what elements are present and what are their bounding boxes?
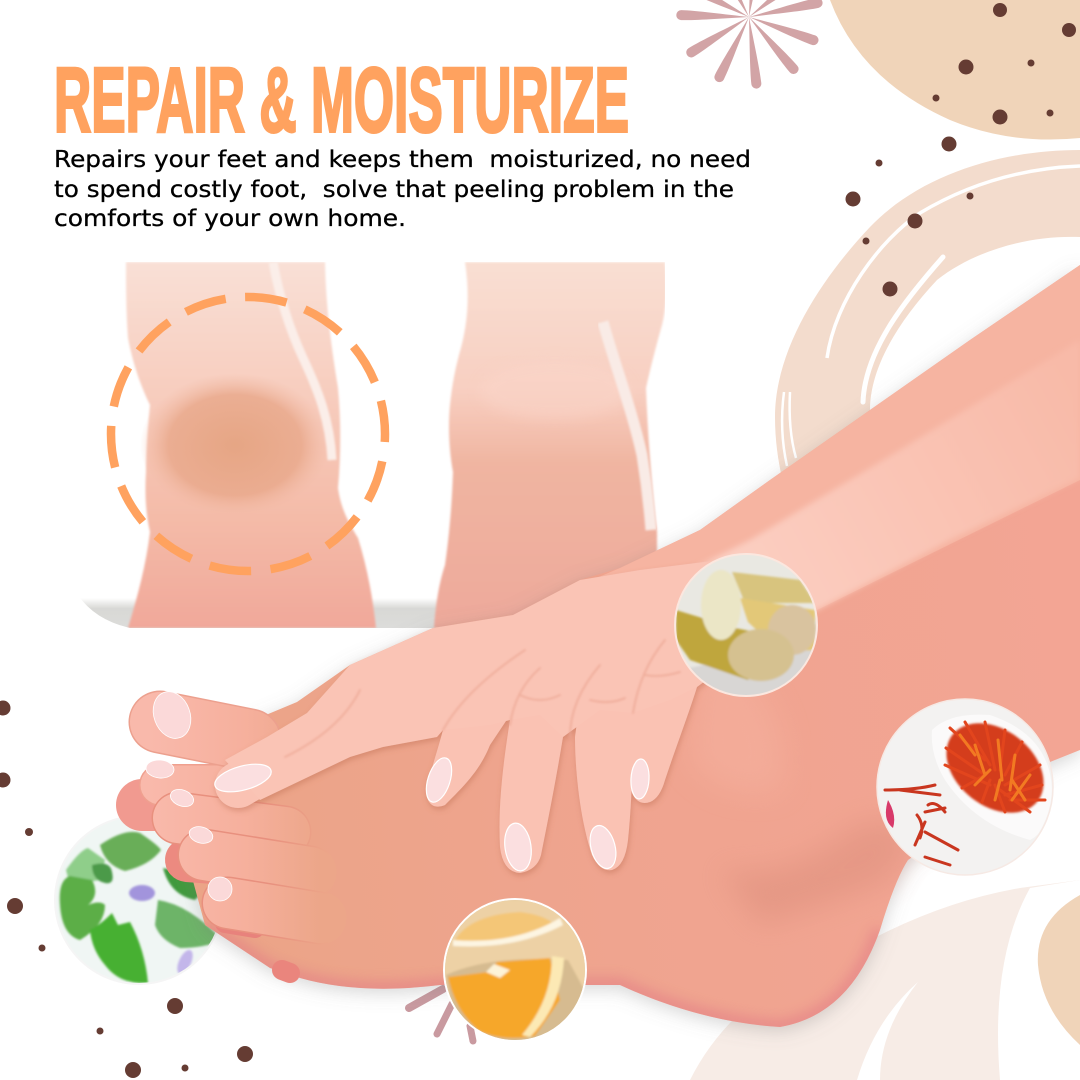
- toenails: [145, 686, 232, 901]
- body text: comforts of your own home.: [54, 204, 406, 232]
- photo: cracked heel and smooth heel: [78, 262, 666, 628]
- body text: Repairs your feet and keeps them moisturized, no need: [54, 145, 751, 173]
- ingredient: sugarcane: [675, 554, 820, 700]
- body text: to spend costly foot, solve that peeling problem in the: [54, 175, 734, 203]
- decorative dots top right: [846, 3, 1076, 296]
- toes: [142, 722, 320, 973]
- sole shading: [205, 925, 880, 1027]
- upper leg: [580, 265, 1080, 610]
- background blobs: [690, 0, 1080, 1080]
- ankle shading: [720, 821, 915, 925]
- leg silhouette: [170, 265, 1080, 1027]
- hand: [212, 560, 760, 873]
- title: REPAIR & MOISTURIZE: [54, 50, 629, 152]
- palm: [225, 560, 760, 800]
- foot and leg: [142, 265, 1080, 1027]
- fingers: [427, 680, 697, 873]
- dashed circle highlight: [111, 297, 385, 571]
- pale band: [640, 340, 1080, 650]
- ingredient: saffron: [877, 699, 1061, 875]
- finger creases: [285, 640, 680, 757]
- decorative dots bottom left: [0, 700, 253, 1078]
- thumb: [238, 722, 345, 785]
- decorative burst bottom: [409, 989, 473, 1041]
- ingredient: orange: [444, 899, 590, 1045]
- decorative burst top: [676, 0, 823, 89]
- body text: [54, 145, 751, 232]
- fingernails: [212, 755, 650, 873]
- ingredient: mint: [55, 816, 223, 984]
